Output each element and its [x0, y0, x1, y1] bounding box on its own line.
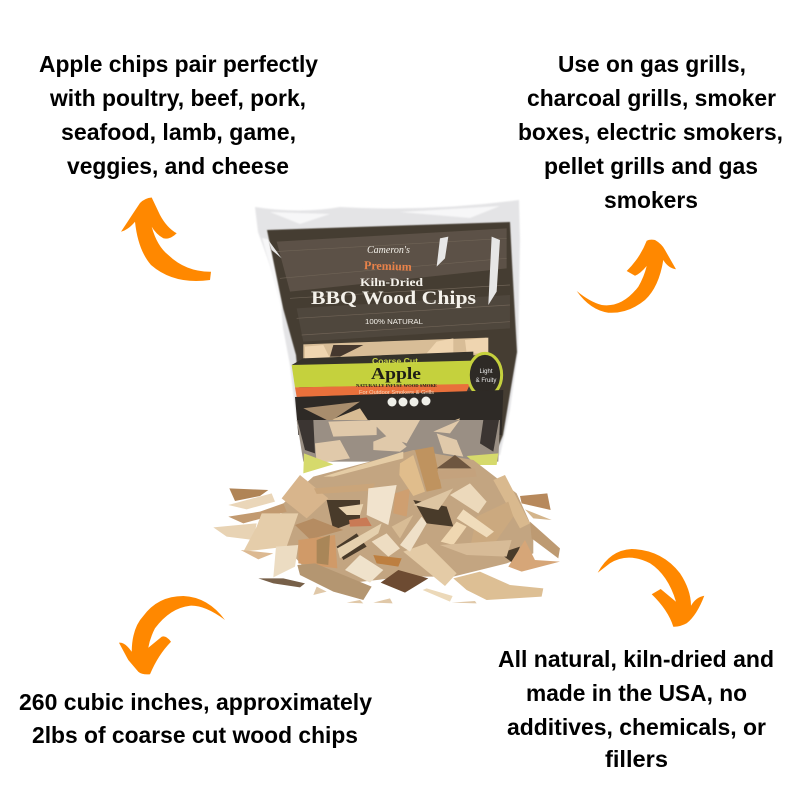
bag: lime flavor band [292, 361, 473, 387]
bag: lower chips [295, 390, 503, 435]
text: food pairings [39, 51, 318, 179]
bag: apple flavor: Apple [371, 364, 422, 383]
bag: product name: BBQ Wood Chips [311, 288, 476, 309]
text: volume and weight: 260 cubic inches, approximately [19, 689, 372, 715]
bag: flavor circle [468, 353, 502, 397]
bag: pairing icons [388, 396, 430, 406]
bag: usage line: For Outdoor Smokers & Grills [359, 390, 435, 396]
bag: coarse cut band [292, 352, 473, 365]
bag: flavor label: Light [479, 369, 493, 375]
text: food pairings: with poultry, beef, pork, [49, 85, 306, 111]
wood chip pile [213, 447, 560, 603]
text: volume and weight: 2lbs of coarse cut wood chips [32, 722, 358, 748]
bag: kiln-dried: Kiln-Dried [360, 277, 424, 289]
text: compatible grills and smokers: charcoal grills, smoker [527, 85, 776, 111]
text: food pairings: Apple chips pair perfectly [39, 51, 318, 77]
text: volume and weight [19, 689, 372, 748]
bag: premium: Premium [364, 258, 412, 274]
bag: dark wood label [267, 222, 517, 450]
text: natural and made in the USA: additives, chemicals, or [507, 714, 766, 740]
arrow: bottom right [598, 549, 704, 627]
text: compatible grills and smokers: Use on gas grills, [558, 51, 746, 77]
text: natural and made in the USA: fillers [605, 746, 668, 772]
bag: orange band [295, 384, 470, 397]
bag: tagline: NATURALLY INFUSE WOOD SMOKE [356, 383, 437, 388]
bag: flavor label [476, 369, 496, 384]
arrow: top right [577, 240, 676, 313]
bag: coarse cut: Coarse Cut [372, 356, 418, 366]
text: natural and made in the USA [498, 646, 774, 772]
bag: flavor label: & Fruity [476, 378, 496, 384]
bag: lower window chips [297, 420, 500, 462]
text: food pairings: seafood, lamb, game, [61, 119, 296, 145]
bag: plastic highlights [262, 206, 500, 310]
bag: brand name: Cameron's [367, 245, 410, 256]
bag: natural claim: 100% NATURAL [365, 319, 423, 326]
text: compatible grills and smokers [518, 51, 783, 213]
text: compatible grills and smokers: boxes, electric smokers, [518, 119, 783, 145]
bag: bottom yellow corners [303, 453, 498, 473]
text: compatible grills and smokers: smokers [604, 187, 698, 213]
text: compatible grills and smokers: pellet grills and gas [544, 153, 758, 179]
text: food pairings: veggies, and cheese [67, 153, 289, 179]
product: bag of apple wood chips [213, 200, 560, 603]
bag: clear plastic body [255, 200, 520, 457]
text: natural and made in the USA: All natural, kiln-dried and [498, 646, 774, 672]
bag: window of wood chips [303, 338, 488, 358]
text: natural and made in the USA: made in the USA, no [526, 680, 747, 706]
arrow: top left [121, 198, 211, 281]
arrow: bottom left [119, 596, 225, 674]
